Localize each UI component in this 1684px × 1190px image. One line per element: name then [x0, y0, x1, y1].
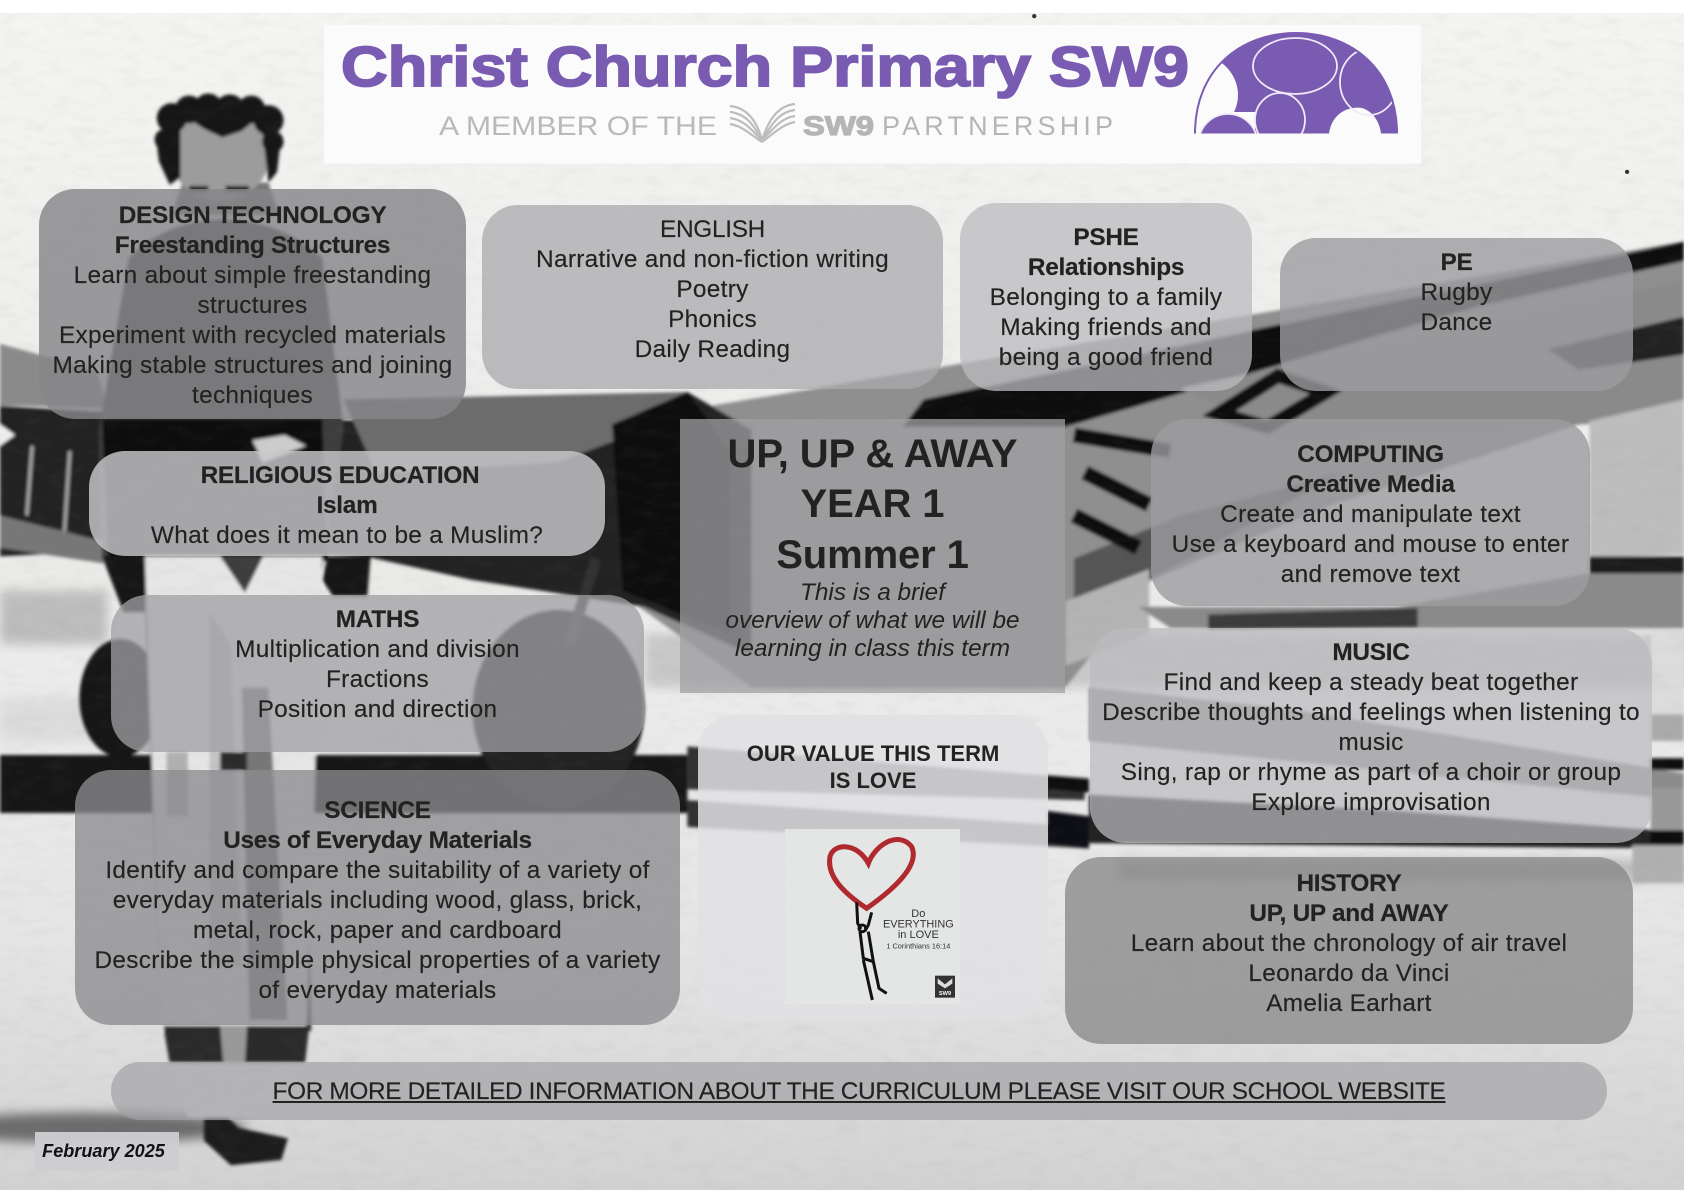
english text: Poetry: [676, 276, 749, 303]
panel: pe: [1280, 238, 1633, 391]
pshe text: Relationships: [1028, 254, 1184, 281]
design technology text: Making stable structures and joining: [53, 352, 452, 379]
value heading: OUR VALUE THIS TERM: [747, 741, 999, 766]
website link text: FOR MORE DETAILED INFORMATION ABOUT THE CURRICULUM PLEASE VISIT OUR SCHOOL WEBSITE: [273, 1078, 1445, 1105]
pshe text: being a good friend: [999, 344, 1213, 371]
english text: Narrative and non-fiction writing: [536, 246, 889, 273]
icon: purple dome: [1194, 32, 1398, 134]
panel: design technology: [39, 189, 466, 419]
music text: Find and keep a steady beat together: [1164, 669, 1578, 696]
date label: February 2025: [42, 1141, 165, 1161]
history text: Learn about the chronology of air travel: [1131, 930, 1567, 957]
lower struts and stripes: [687, 746, 1085, 800]
neck and head: [172, 183, 279, 215]
computing text: Creative Media: [1286, 471, 1455, 498]
picture caption: EVERYTHING: [883, 919, 954, 931]
music text: [1102, 639, 1640, 816]
design technology text: Freestanding Structures: [115, 232, 390, 259]
pshe text: Making friends and: [1000, 314, 1212, 341]
science text: of everyday materials: [258, 977, 497, 1004]
picture caption: in LOVE: [898, 929, 939, 941]
history text: UP, UP and AWAY: [1249, 900, 1449, 927]
design technology text: Experiment with recycled materials: [59, 322, 446, 349]
english text: Daily Reading: [635, 336, 790, 363]
computing text: Create and manipulate text: [1220, 501, 1521, 528]
topic intro: [725, 578, 1020, 662]
upper wing / fuselage: [601, 242, 1684, 687]
panel: website footer: [111, 1062, 1607, 1120]
panel: computing: [1151, 419, 1590, 606]
strapline SW9: SW9: [803, 111, 874, 141]
strapline PARTNERSHIP: PARTNERSHIP: [882, 111, 1113, 141]
shoes: [204, 1117, 288, 1165]
science text: Describe the simple physical properties of a variety: [94, 947, 660, 974]
pshe text: [990, 224, 1222, 371]
wheels and strut: [0, 755, 687, 813]
music text: Sing, rap or rhyme as part of a choir or group: [1121, 759, 1621, 786]
maths text: [235, 606, 520, 723]
science text: everyday materials including wood, glass, brick,: [113, 887, 642, 914]
panel: religious education: [89, 451, 605, 556]
icon: hanging figure: [857, 902, 887, 1000]
strapline left: A MEMBER OF THE: [439, 111, 717, 141]
music text: Explore improvisation: [1251, 789, 1491, 816]
value heading: [747, 741, 999, 793]
maths text: MATHS: [336, 606, 419, 633]
panel: topic title: [680, 419, 1065, 693]
maths text: Multiplication and division: [235, 636, 520, 663]
panel: science: [75, 770, 680, 1025]
pe text: PE: [1440, 249, 1472, 276]
religious education text: RELIGIOUS EDUCATION: [201, 462, 479, 488]
history text: HISTORY: [1296, 870, 1402, 896]
music text: music: [1338, 729, 1404, 756]
design technology text: DESIGN TECHNOLOGY: [119, 202, 386, 228]
english text: [536, 216, 889, 363]
history text: Amelia Earhart: [1266, 990, 1432, 1017]
panel: pshe: [960, 203, 1252, 391]
religious education text: [151, 462, 543, 549]
pilot body and trousers: [99, 219, 344, 1031]
science text: Uses of Everyday Materials: [223, 827, 532, 854]
design technology text: [53, 202, 452, 409]
topic intro: overview of what we will be: [725, 606, 1020, 634]
religious education text: Islam: [316, 492, 377, 519]
computing text: COMPUTING: [1297, 440, 1444, 468]
science text: Identify and compare the suitability of a variety of: [105, 857, 650, 884]
topic heading: YEAR 1: [801, 482, 944, 526]
panel: english: [482, 205, 943, 389]
logo title text: Christ Church Primary SW9: [341, 35, 1189, 99]
panel: music: [1090, 628, 1652, 843]
design technology text: structures: [197, 292, 308, 319]
computing text: Use a keyboard and mouse to enter: [1172, 531, 1569, 558]
computing text: and remove text: [1281, 561, 1460, 588]
pe text: Rugby: [1420, 279, 1492, 306]
pe text: [1420, 249, 1492, 336]
pe text: Dance: [1420, 309, 1492, 336]
value heading: IS LOVE: [830, 768, 916, 793]
topic intro: This is a brief: [800, 578, 945, 606]
history text: Leonardo da Vinci: [1248, 960, 1450, 987]
icon: sw9 badge: [935, 976, 955, 998]
panel: history: [1065, 857, 1633, 1044]
school logo banner: [324, 25, 1421, 164]
picture caption: [883, 908, 954, 950]
topic heading: [728, 432, 1017, 577]
music text: Describe thoughts and feelings when listening to: [1102, 699, 1640, 726]
science text: metal, rock, paper and cardboard: [193, 917, 562, 944]
topic intro: learning in class this term: [735, 634, 1010, 662]
pshe text: Belonging to a family: [990, 284, 1222, 311]
science text: SCIENCE: [324, 796, 431, 824]
english text: ENGLISH: [660, 216, 765, 243]
computing text: [1172, 440, 1569, 588]
science text: [94, 796, 660, 1004]
maths text: Position and direction: [258, 696, 497, 723]
icon: sw9 badge: SW9: [939, 991, 951, 997]
music text: MUSIC: [1332, 639, 1410, 666]
pshe text: PSHE: [1073, 224, 1139, 250]
engine and nose, left: [0, 392, 752, 655]
icon: red heart: [830, 839, 913, 908]
icon: SW9 wings: [730, 104, 795, 142]
maths text: Fractions: [326, 666, 429, 693]
design technology text: techniques: [192, 382, 313, 409]
picture caption: Do: [911, 908, 925, 920]
panel: maths: [111, 595, 644, 752]
religious education text: What does it mean to be a Muslim?: [151, 522, 543, 549]
value picture: do everything in love: [785, 829, 960, 1000]
picture caption: 1 Corinthians 16:14: [886, 943, 950, 950]
date label: [35, 1132, 179, 1171]
topic heading: Summer 1: [776, 533, 969, 577]
english text: Phonics: [668, 306, 757, 333]
topic heading: UP, UP & AWAY: [728, 432, 1017, 476]
design technology text: Learn about simple freestanding: [74, 262, 431, 289]
history text: [1131, 870, 1567, 1017]
panel: our value: [698, 715, 1048, 1021]
